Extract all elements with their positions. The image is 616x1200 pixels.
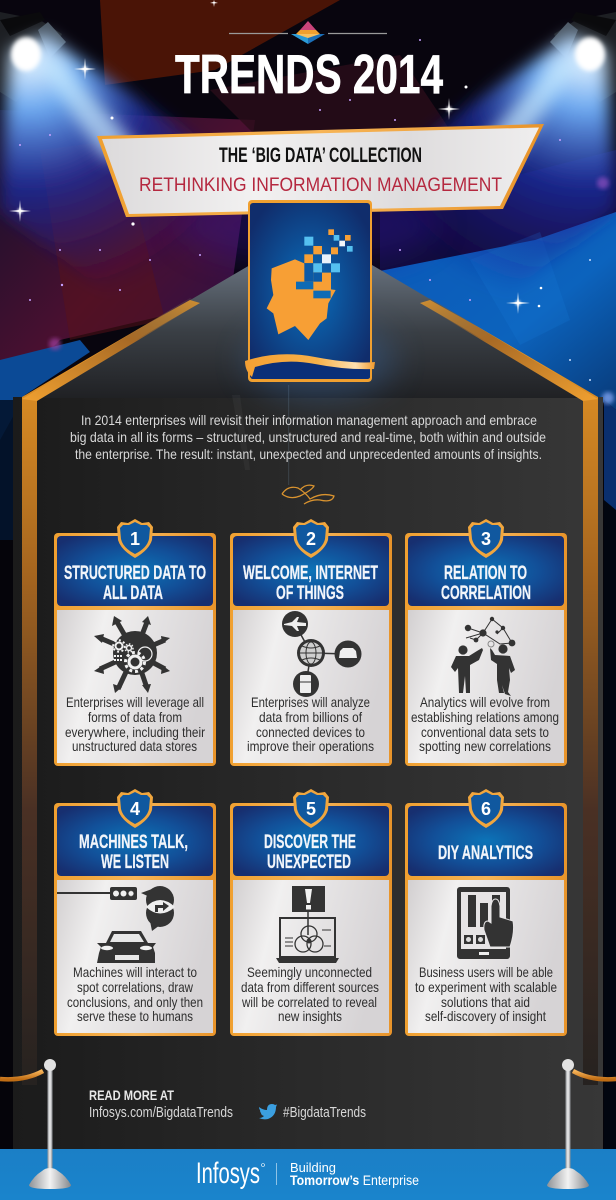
badge 4 bbox=[117, 789, 153, 828]
badge 6 bbox=[468, 789, 504, 828]
card 4 text: Machines will interact to bbox=[73, 964, 197, 980]
card 1 text: Enterprises will leverage all bbox=[66, 694, 204, 710]
icon: gears burst bbox=[94, 616, 170, 693]
card 1 title bbox=[64, 562, 206, 604]
card 6 text: Business users will be able bbox=[419, 964, 553, 980]
orange stage frame bbox=[22, 298, 598, 1085]
banner subheading: RETHINKING INFORMATION MANAGEMENT bbox=[139, 174, 502, 196]
card 4 text: conclusions, and only then bbox=[67, 994, 203, 1010]
ribbon and lower book panel bbox=[245, 354, 375, 379]
intro paragraph: In 2014 enterprises will revisit their information management approach and embrace bbox=[81, 412, 537, 428]
hashtag: #BigdataTrends bbox=[283, 1105, 366, 1121]
spotlight beams bbox=[0, 35, 616, 300]
card 2 title: OF THINGS bbox=[276, 582, 344, 604]
badge 5: 5 bbox=[306, 799, 316, 819]
infosys logo: Infosys bbox=[196, 1157, 260, 1190]
card 3 title: CORRELATION bbox=[441, 582, 531, 604]
card 5 title: UNEXPECTED bbox=[267, 851, 351, 873]
badge 4: 4 bbox=[130, 799, 140, 819]
icon: two men and network bbox=[451, 617, 515, 696]
icon: connected devices bbox=[282, 611, 362, 697]
card 3 text bbox=[411, 694, 559, 754]
panel: card 1 bbox=[54, 519, 216, 766]
card 5 title bbox=[264, 831, 356, 873]
card 2 text: Enterprises will analyze bbox=[251, 694, 370, 710]
card 5 title: DISCOVER THE bbox=[264, 831, 356, 853]
intro paragraph bbox=[70, 412, 546, 462]
rope barrier: right bbox=[547, 1059, 616, 1189]
tagline: Tomorrow’s Enterprise bbox=[290, 1173, 419, 1188]
badge 3 bbox=[468, 519, 504, 558]
card 6 text: to experiment with scalable bbox=[415, 979, 557, 995]
intro paragraph: the enterprise. The result: instant, unexpected and unprecedented amounts of insights. bbox=[75, 446, 542, 462]
read more block bbox=[89, 1087, 233, 1121]
card 1 text bbox=[65, 694, 205, 754]
card 3 text: Analytics will evolve from bbox=[420, 694, 550, 710]
badge 1 bbox=[117, 519, 153, 558]
panel: card 3 bbox=[405, 519, 567, 766]
icon: twitter bird bbox=[259, 1104, 277, 1119]
card 4 text: serve these to humans bbox=[77, 1008, 193, 1024]
read more block: READ MORE AT bbox=[89, 1087, 174, 1103]
card 4 text bbox=[67, 964, 203, 1024]
card 5 text: data from different sources bbox=[241, 979, 379, 995]
banner heading: THE ‘BIG DATA’ COLLECTION bbox=[219, 144, 422, 167]
card 5 text: new insights bbox=[278, 1008, 342, 1024]
card 1 text: everywhere, including their bbox=[65, 724, 205, 740]
icon: traffic light and car bbox=[57, 886, 175, 963]
stage surface bbox=[13, 265, 603, 1150]
card 3 title: RELATION TO bbox=[444, 562, 527, 584]
card 1 title: STRUCTURED DATA TO bbox=[64, 562, 206, 584]
card 2 title: WELCOME, INTERNET bbox=[243, 562, 378, 584]
card 4 text: spot correlations, draw bbox=[77, 979, 194, 995]
icon: alert over laptop with venn bbox=[276, 886, 339, 963]
card 2 text: improve their operations bbox=[247, 738, 374, 754]
book emblem bbox=[245, 200, 375, 382]
card 5 text bbox=[241, 964, 379, 1024]
card 3 text: spotting new correlations bbox=[419, 738, 551, 754]
spotlight lamps bbox=[11, 37, 605, 71]
card 2 text: data from billions of bbox=[259, 709, 362, 725]
badge 6: 6 bbox=[481, 799, 491, 819]
card 2 text bbox=[247, 694, 374, 754]
tagline bbox=[276, 1160, 419, 1188]
card 6 text: solutions that aid bbox=[441, 994, 530, 1010]
badge 2 bbox=[293, 519, 329, 558]
panel: card 5 bbox=[230, 789, 392, 1036]
panel: card 2 bbox=[230, 519, 392, 766]
spotlight housing: left bbox=[0, 12, 66, 102]
card 4 title bbox=[79, 831, 188, 873]
card 2 title bbox=[243, 562, 378, 604]
title: TRENDS 2014 bbox=[175, 43, 443, 105]
card 6 text: self-discovery of insight bbox=[425, 1008, 546, 1024]
spotlight housing: right bbox=[550, 12, 616, 102]
badge 1: 1 bbox=[130, 529, 140, 549]
card 1 text: unstructured data stores bbox=[72, 738, 197, 754]
card 4 title: WE LISTEN bbox=[101, 851, 169, 873]
card 6 title: DIY ANALYTICS bbox=[438, 842, 533, 864]
card 5 text: Seemingly unconnected bbox=[247, 964, 372, 980]
panel: card 4 bbox=[54, 789, 216, 1036]
card 5 text: will be correlated to reveal bbox=[241, 994, 377, 1010]
card 1 text: forms of data from bbox=[88, 709, 182, 725]
card 4 title: MACHINES TALK, bbox=[79, 831, 188, 853]
panel: card 6 bbox=[405, 789, 567, 1036]
rope barrier: left bbox=[0, 1059, 71, 1189]
card 3 text: establishing relations among bbox=[411, 709, 559, 725]
tagline: Building bbox=[290, 1160, 336, 1175]
card 3 text: conventional data sets to bbox=[421, 724, 549, 740]
banner bbox=[97, 124, 544, 217]
badge 2: 2 bbox=[306, 529, 316, 549]
card 1 title: ALL DATA bbox=[103, 582, 163, 604]
icon: tablet with touch chart bbox=[457, 887, 514, 959]
badge 3: 3 bbox=[481, 529, 491, 549]
badge 5 bbox=[293, 789, 329, 828]
card 6 text bbox=[415, 964, 557, 1024]
intro paragraph: big data in all its forms – structured, unstructured and real-time, both within and outside bbox=[70, 429, 546, 445]
pyramid logo bbox=[229, 21, 387, 44]
star field bbox=[19, 39, 614, 404]
icon: head with data pixels bbox=[267, 229, 353, 340]
sparkles bbox=[9, 0, 530, 314]
ornament bbox=[282, 485, 334, 504]
card 3 title bbox=[441, 562, 531, 604]
read more block: Infosys.com/BigdataTrends bbox=[89, 1105, 233, 1121]
card 2 text: connected devices to bbox=[256, 724, 365, 740]
footer band bbox=[0, 1149, 616, 1200]
